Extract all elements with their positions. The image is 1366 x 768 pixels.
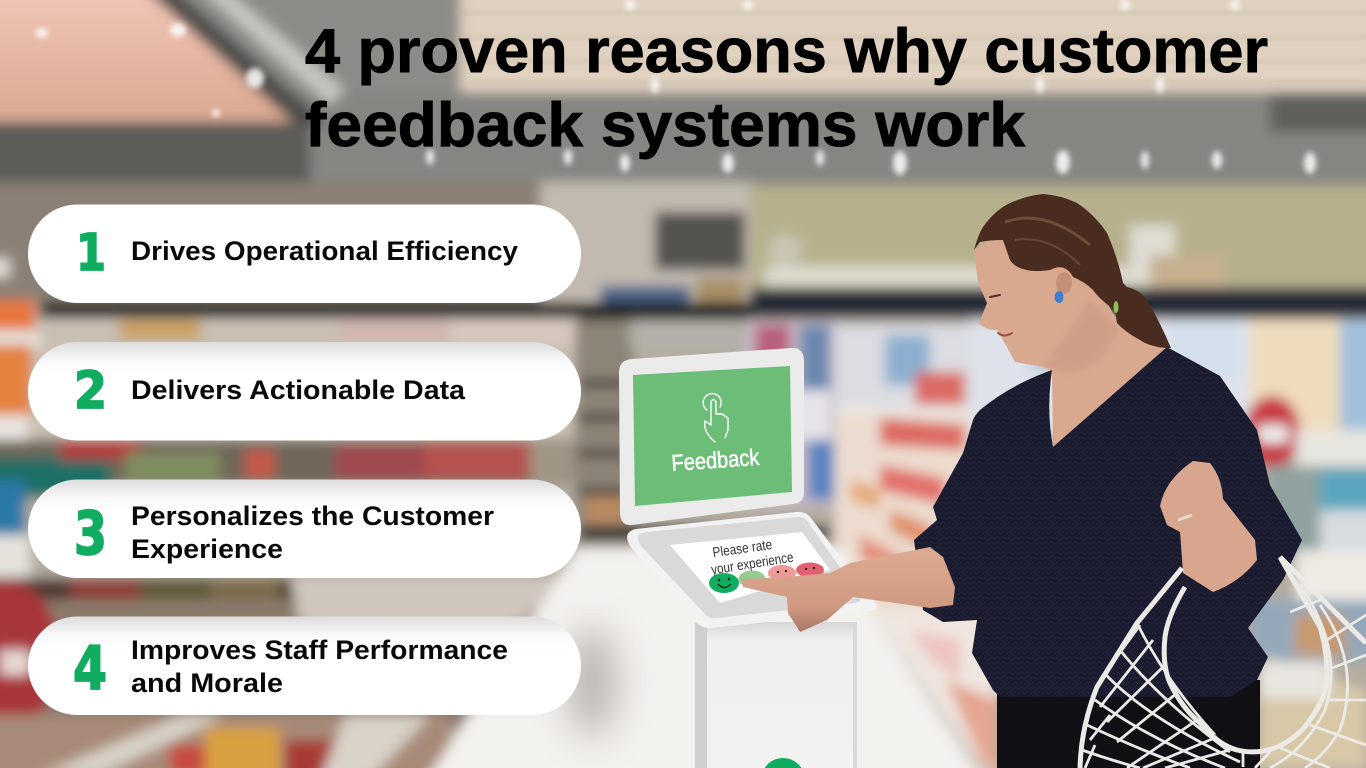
sweater [914, 347, 1302, 697]
list item 4: and Morale [131, 668, 283, 698]
shelves [40, 302, 750, 320]
icon: tap finger [703, 394, 728, 442]
list item 3: Experience [131, 534, 283, 564]
kiosk lower tablet [627, 512, 877, 628]
title [305, 17, 1268, 160]
kiosk [619, 348, 877, 768]
ceiling slats [455, 11, 1366, 83]
shopping basket [1080, 557, 1366, 768]
neck shadow [1043, 300, 1120, 372]
list item 4: Improves Staff Performance [131, 635, 508, 665]
basket rim right [1280, 557, 1366, 643]
woman [742, 194, 1366, 768]
ring [1178, 515, 1192, 520]
hair [974, 194, 1171, 348]
floor [420, 548, 990, 768]
list item 3: Personalizes the Customer [131, 501, 495, 531]
list item 2: 2 [74, 362, 107, 421]
basket grid right [1270, 585, 1348, 768]
pointing arm [742, 547, 955, 632]
list item 2 [28, 342, 581, 440]
rating prompt: your experience [710, 549, 795, 577]
rating prompt: Please rate [711, 536, 773, 560]
kiosk upper tablet [619, 348, 804, 525]
basket grid left [1082, 623, 1240, 768]
floor shadow beside pills [566, 627, 618, 737]
ceiling lights [36, 0, 1316, 175]
list item 4: 4 [73, 634, 107, 704]
list item 1: Drives Operational Efficiency [131, 236, 518, 266]
neck and face [974, 235, 1167, 447]
earring [1054, 291, 1064, 303]
screen label: Feedback [671, 444, 761, 476]
kiosk stand [695, 622, 857, 768]
list item 3: 3 [74, 499, 107, 569]
title: 4 proven reasons why customer [305, 17, 1268, 86]
list item 3 [28, 480, 581, 578]
ear [1056, 272, 1072, 294]
rating smileys [709, 562, 824, 593]
list item 4 [28, 616, 581, 715]
face details [990, 295, 1012, 336]
basket loop [1164, 557, 1327, 752]
rating prompt [710, 536, 795, 577]
list item 1: 1 [76, 224, 106, 283]
title: feedback systems work [305, 91, 1026, 160]
skirt [997, 680, 1260, 768]
list item 1 [28, 204, 581, 303]
list item 2: Delivers Actionable Data [131, 375, 466, 405]
basket rim left [1080, 568, 1182, 768]
hair tie [1114, 301, 1118, 313]
right forearm and hand [1160, 461, 1257, 592]
